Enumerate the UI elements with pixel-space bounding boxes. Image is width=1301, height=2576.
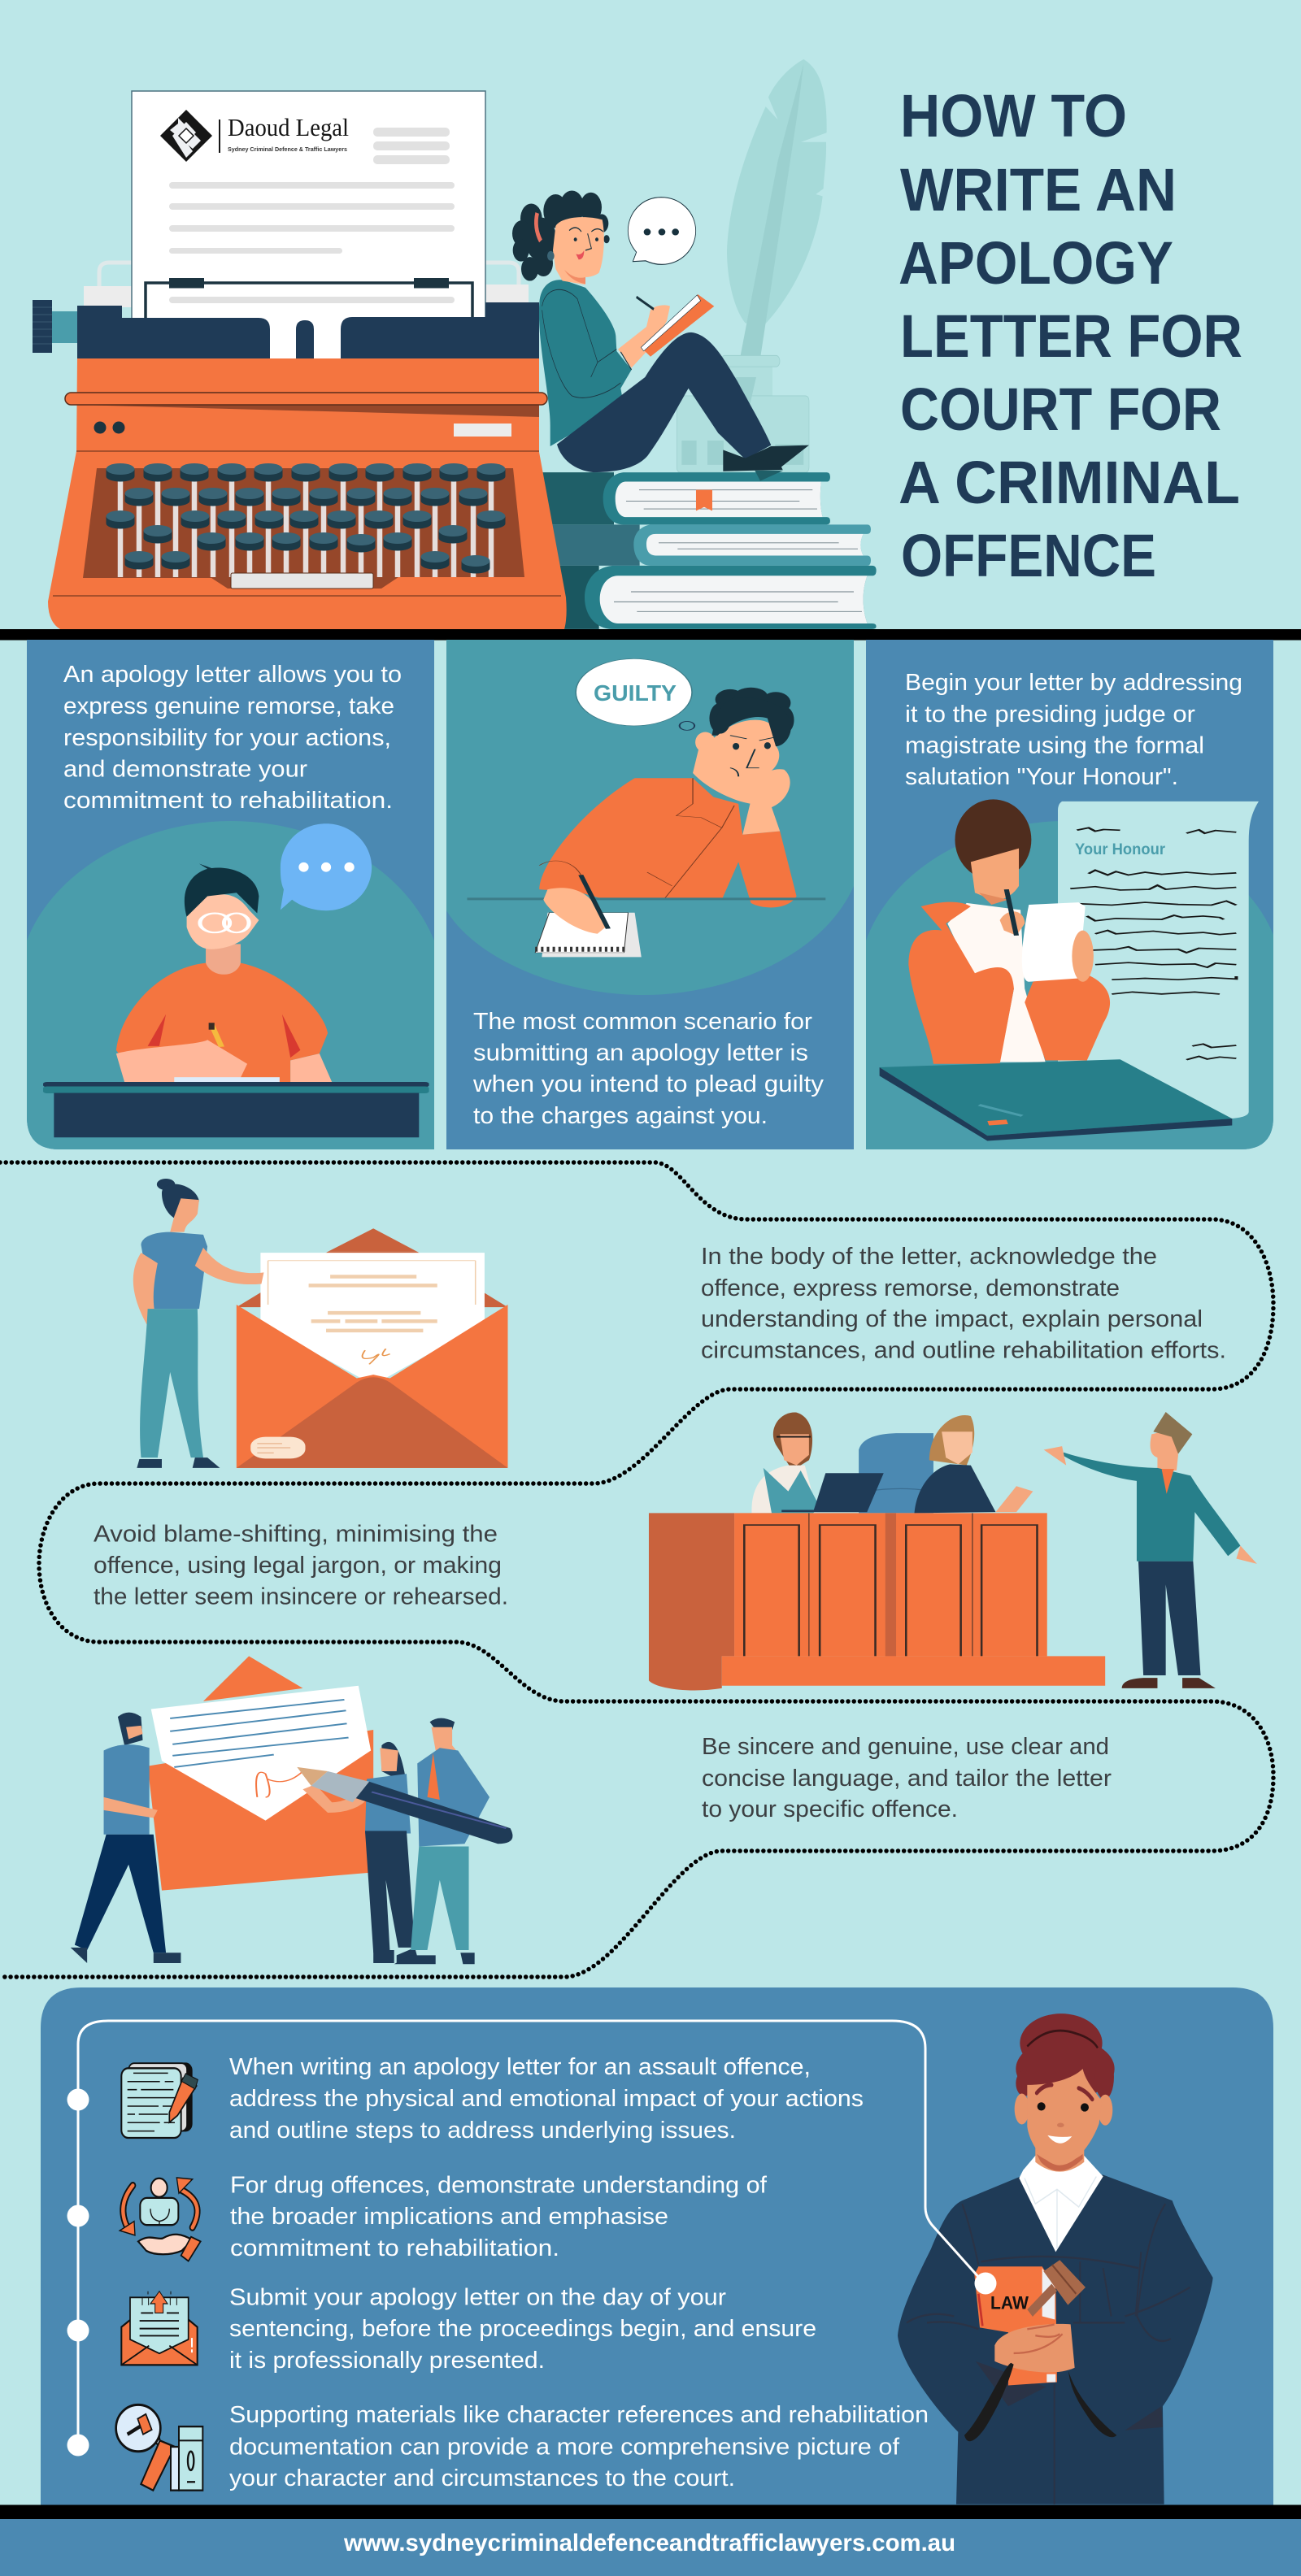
text: avoid blame-shifting bbox=[94, 1522, 508, 1609]
text: avoid blame-shifting: offence, using legal jargon, or making bbox=[94, 1553, 502, 1579]
text: panel 2: to the charges against you. bbox=[473, 1103, 768, 1129]
illustration: judge with law book and gavel bbox=[898, 2013, 1213, 2504]
logo: Daoud Legal: Daoud Legal bbox=[228, 113, 349, 141]
illustration: letter to Your Honour bbox=[880, 799, 1259, 1140]
text: supporting materials: Supporting materials like character references and rehabilitation bbox=[229, 2402, 929, 2428]
illustration: woman writing on books bbox=[512, 190, 809, 481]
illustration: feather quill in ink bottle bbox=[677, 59, 827, 472]
text: avoid blame-shifting: Avoid blame-shifting, minimising the bbox=[94, 1522, 498, 1548]
title: A CRIMINAL bbox=[899, 449, 1240, 516]
dotted connector path bbox=[0, 1162, 1273, 1977]
text: panel 3 bbox=[905, 670, 1242, 790]
text: be sincere: concise language, and tailor the letter bbox=[702, 1766, 1112, 1792]
text: body of the letter bbox=[701, 1244, 1226, 1364]
text: submitting the letter: it is professionally presented. bbox=[229, 2348, 545, 2374]
text: panel 1: commitment to rehabilitation. bbox=[63, 788, 393, 814]
title: APOLOGY bbox=[899, 229, 1173, 297]
text: be sincere bbox=[702, 1734, 1112, 1822]
text: body of the letter: In the body of the letter, acknowledge the bbox=[701, 1244, 1157, 1270]
logo: Daoud Legal: Sydney Criminal Defence & Traffic Lawyers bbox=[228, 146, 347, 153]
text: body of the letter: understanding of the impact, explain personal bbox=[701, 1306, 1203, 1332]
text: assault offence: address the physical and emotional impact of your actions bbox=[229, 2086, 864, 2112]
title: HOW TO bbox=[900, 82, 1127, 150]
icon: letter in envelope bbox=[121, 2291, 198, 2365]
paper with letterhead bbox=[132, 91, 485, 359]
label: LAW: LAW bbox=[990, 2292, 1029, 2313]
text: supporting materials: your character and circumstances to the court. bbox=[229, 2465, 735, 2491]
illustration: person writing at desk bbox=[43, 823, 429, 1137]
text: drug offences: commitment to rehabilitation. bbox=[230, 2235, 559, 2261]
text: panel 2: The most common scenario for bbox=[473, 1009, 812, 1035]
text: body of the letter: offence, express remorse, demonstrate bbox=[701, 1275, 1120, 1301]
text: panel 2: submitting an apology letter is bbox=[473, 1040, 808, 1066]
text: panel 1: and demonstrate your bbox=[63, 756, 307, 782]
text: supporting materials: documentation can provide a more comprehensive picture of bbox=[229, 2434, 900, 2460]
text: submitting the letter: sentencing, before the proceedings begin, and ensure bbox=[229, 2316, 816, 2342]
text: assault offence: When writing an apology letter for an assault offence, bbox=[229, 2054, 811, 2080]
panel: apology letter purpose bbox=[27, 640, 434, 1149]
timeline connector bbox=[67, 2021, 997, 2457]
text: panel 2 bbox=[472, 1009, 825, 1129]
text: supporting materials bbox=[229, 2402, 929, 2491]
illustration: courtroom bbox=[649, 1412, 1257, 1691]
icon: document and pencil bbox=[121, 2062, 198, 2138]
illustration: worried man writing bbox=[467, 658, 825, 957]
illustration: typewriter bbox=[33, 91, 567, 629]
label: GUILTY: GUILTY bbox=[594, 680, 677, 706]
footer band bbox=[0, 2519, 1301, 2576]
text: panel 1 bbox=[63, 662, 402, 814]
illustration: woman with open envelope bbox=[133, 1179, 507, 1468]
text: drug offences bbox=[230, 2172, 768, 2261]
text: submitting the letter: Submit your apology letter on the day of your bbox=[229, 2284, 726, 2310]
text: assault offence bbox=[229, 2054, 864, 2144]
panel: addressing the judge bbox=[866, 640, 1273, 1149]
text: panel 2: when you intend to plead guilty bbox=[472, 1071, 825, 1097]
panel: bottom tips bbox=[41, 1987, 1273, 2505]
illustration: people signing a giant letter bbox=[71, 1656, 512, 1964]
text: drug offences: the broader implications and emphasise bbox=[230, 2204, 668, 2230]
text: panel 1: responsibility for your actions, bbox=[63, 725, 391, 751]
text: drug offences: For drug offences, demonstrate understanding of bbox=[230, 2172, 768, 2198]
title bbox=[899, 82, 1242, 589]
text: body of the letter: circumstances, and outline rehabilitation efforts. bbox=[701, 1338, 1226, 1364]
title: LETTER FOR bbox=[900, 302, 1242, 370]
title: COURT FOR bbox=[900, 376, 1221, 443]
text: panel 1: An apology letter allows you to bbox=[63, 662, 402, 688]
icon: rehabilitation person and hand bbox=[120, 2178, 201, 2261]
text: panel 3: salutation "Your Honour". bbox=[905, 764, 1178, 790]
text: submitting the letter bbox=[229, 2284, 816, 2374]
icon: speech bubble bbox=[628, 198, 696, 264]
illustration: stack of books bbox=[531, 472, 877, 629]
title: WRITE AN bbox=[900, 156, 1177, 224]
text: panel 3: magistrate using the formal bbox=[905, 733, 1204, 759]
text: panel 3: Begin your letter by addressing bbox=[905, 670, 1242, 696]
footer band: www.sydneycriminaldefenceandtrafficlawyers.com.au bbox=[343, 2530, 955, 2556]
title: OFFENCE bbox=[901, 522, 1156, 589]
text: panel 3: it to the presiding judge or bbox=[905, 702, 1195, 728]
text: panel 1: express genuine remorse, take bbox=[63, 693, 394, 719]
label: Your Honour: Your Honour bbox=[1075, 841, 1166, 858]
logo: Daoud Legal bbox=[160, 110, 349, 162]
icon: gavel and books bbox=[116, 2404, 202, 2491]
text: avoid blame-shifting: the letter seem insincere or rehearsed. bbox=[94, 1583, 508, 1609]
panel: pleading guilty scenario bbox=[446, 640, 854, 1149]
text: be sincere: Be sincere and genuine, use clear and bbox=[702, 1734, 1109, 1760]
text: assault offence: and outline steps to address underlying issues. bbox=[229, 2118, 736, 2144]
text: be sincere: to your specific offence. bbox=[702, 1796, 958, 1822]
